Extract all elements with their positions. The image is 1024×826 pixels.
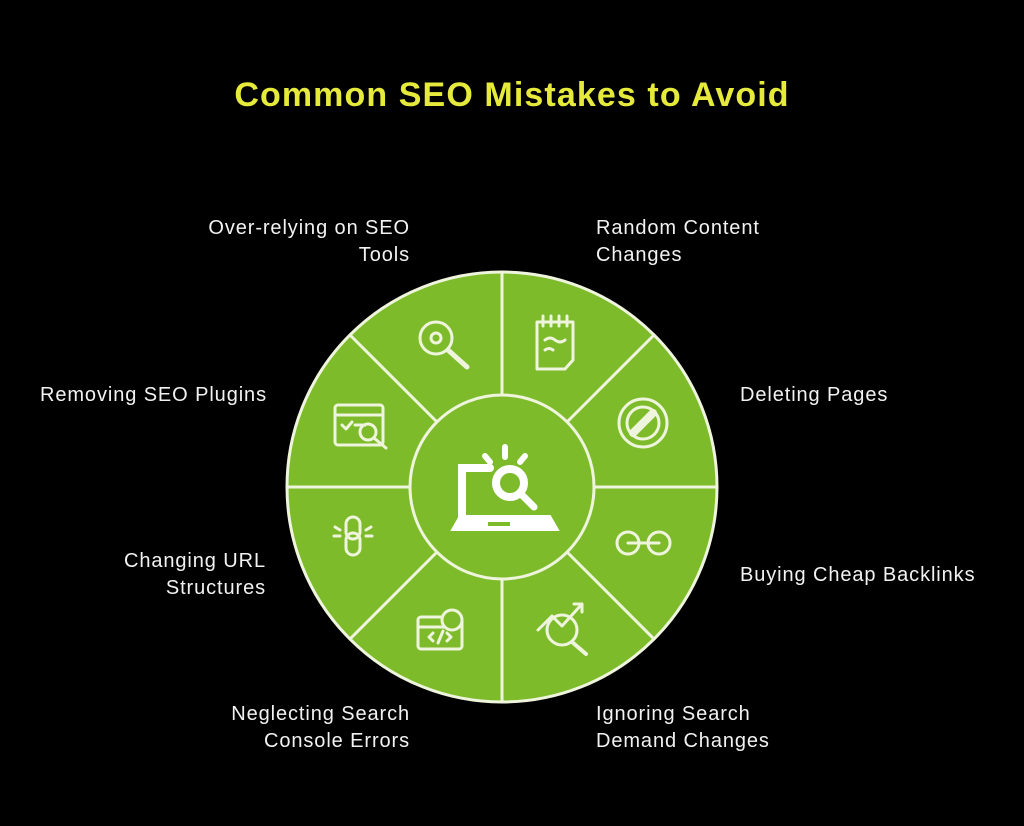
icon: code search xyxy=(418,610,462,649)
label: over-relying on SEO tools: Over-relying on SEO xyxy=(208,217,410,239)
icon: notepad xyxy=(537,316,573,369)
icon: browser search xyxy=(335,405,386,448)
label: neglecting search console errors xyxy=(231,703,410,752)
label: ignoring search demand changes: Ignoring Search xyxy=(596,703,751,725)
icon: link xyxy=(617,532,670,554)
icon: gear magnifier xyxy=(420,322,467,367)
label: neglecting search console errors: Console Errors xyxy=(264,730,410,752)
label: buying cheap backlinks: Buying Cheap Backlinks xyxy=(740,564,975,586)
icon: trend arrow xyxy=(538,604,586,654)
icon: chain xyxy=(334,517,372,555)
label: neglecting search console errors: Neglecting Search xyxy=(231,703,410,725)
label: random content changes xyxy=(596,217,760,266)
icon: center laptop search xyxy=(452,447,558,530)
label: over-relying on SEO tools xyxy=(208,217,410,266)
label: deleting pages: Deleting Pages xyxy=(740,384,888,406)
label: over-relying on SEO tools: Tools xyxy=(359,244,410,266)
label: random content changes: Changes xyxy=(596,244,682,266)
label: ignoring search demand changes xyxy=(596,703,770,752)
label: changing URL structures xyxy=(124,550,266,599)
label: removing SEO plugins: Removing SEO Plugins xyxy=(40,384,267,406)
label: ignoring search demand changes: Demand Changes xyxy=(596,730,770,752)
title: Common SEO Mistakes to Avoid xyxy=(234,76,790,114)
label: random content changes: Random Content xyxy=(596,217,760,239)
label: changing URL structures: Changing URL xyxy=(124,550,266,572)
icon: prohibited xyxy=(619,399,667,447)
label: changing URL structures: Structures xyxy=(166,577,266,599)
